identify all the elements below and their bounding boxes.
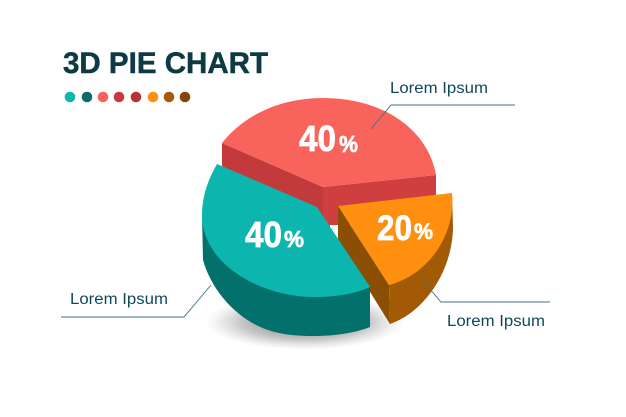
value: teal 40%: % (284, 226, 304, 252)
title: 3D PIE CHART (63, 47, 268, 80)
red slice left wall (222, 143, 323, 227)
red slice top (222, 98, 436, 187)
callout: red slice: Lorem Ipsum (390, 80, 488, 97)
orange slice outer wall (389, 193, 453, 324)
orange slice top (338, 193, 452, 285)
value: orange 20%: % (414, 219, 433, 244)
callout: orange slice: Lorem Ipsum (447, 313, 545, 330)
teal slice top (202, 164, 370, 297)
value: red 40% (299, 118, 358, 159)
pie slice: red 40% (222, 98, 436, 227)
legend dots (65, 92, 190, 102)
pie slice: orange 20% (338, 193, 453, 324)
pie slice: teal 40% (202, 164, 370, 336)
callout: teal slice (61, 285, 211, 317)
orange slice left wall (338, 206, 390, 324)
value: orange 20%: 20 (377, 209, 412, 248)
callout: teal slice: Lorem Ipsum (70, 291, 168, 308)
gap highlight (330, 225, 339, 241)
value: red 40%: % (339, 131, 358, 157)
teal slice side wall (202, 215, 370, 336)
callout: red slice (371, 80, 515, 129)
value: orange 20% (377, 209, 433, 248)
red slice front wall (323, 175, 436, 227)
callout: orange slice (424, 282, 550, 330)
value: teal 40% (245, 214, 304, 255)
ground shadow (205, 294, 405, 350)
value: teal 40%: 40 (245, 214, 282, 255)
value: red 40%: 40 (299, 118, 336, 159)
